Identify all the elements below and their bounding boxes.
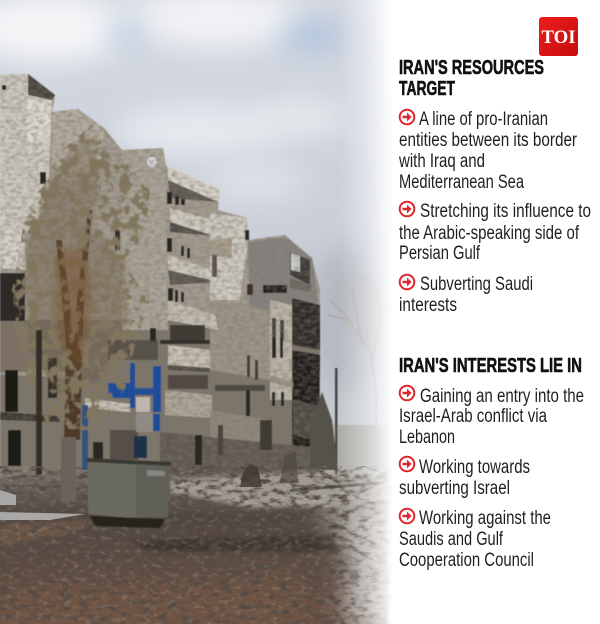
heading: Iran's resources target: IRAN'S RESOURCES <box>399 57 544 79</box>
heading: Iran's resources target: TARGET <box>399 78 455 100</box>
bullet 5: subverting Israel <box>399 478 510 499</box>
blue panels on facade <box>82 363 161 470</box>
bullet 3: interests <box>399 295 457 316</box>
logo: TOI: TOI <box>542 27 576 48</box>
dumpster <box>61 437 171 528</box>
tree on the left <box>11 125 150 475</box>
ground with rubble <box>0 452 395 624</box>
list: resources target <box>398 109 591 316</box>
buildings <box>0 70 325 485</box>
sky with clouds <box>0 0 395 500</box>
bullet 6: Working against the <box>419 508 551 529</box>
bullet 5: Working towards <box>419 457 530 478</box>
bullet 6: Cooperation Council <box>399 550 534 571</box>
bullet 1: Mediterranean Sea <box>399 172 524 193</box>
bullet 2: Persian Gulf <box>399 243 481 264</box>
right column background <box>392 0 600 624</box>
windows and openings <box>0 85 284 468</box>
logo: TOI <box>539 17 578 56</box>
bullet 6 <box>399 508 551 571</box>
bullet 3 <box>399 274 533 316</box>
bullet 4: Israel-Arab conflict via <box>399 406 547 427</box>
bullet 5 <box>399 457 530 499</box>
bullet 1: A line of pro-Iranian <box>419 109 548 130</box>
fade to white <box>340 0 393 624</box>
bullet 4 <box>399 386 584 448</box>
distant street, pole and bare trees <box>310 275 390 480</box>
bullet 6: Saudis and Gulf <box>399 529 504 550</box>
bullet 2 <box>399 201 591 264</box>
bullet 1 <box>398 109 578 193</box>
bullet 4: Lebanon <box>399 427 455 448</box>
bullet 3: Subverting Saudi <box>420 274 533 295</box>
list: interests lie in <box>399 386 584 571</box>
photo: ruined street under cloudy sky <box>0 0 395 624</box>
bullet 1: with Iraq and <box>398 151 485 172</box>
